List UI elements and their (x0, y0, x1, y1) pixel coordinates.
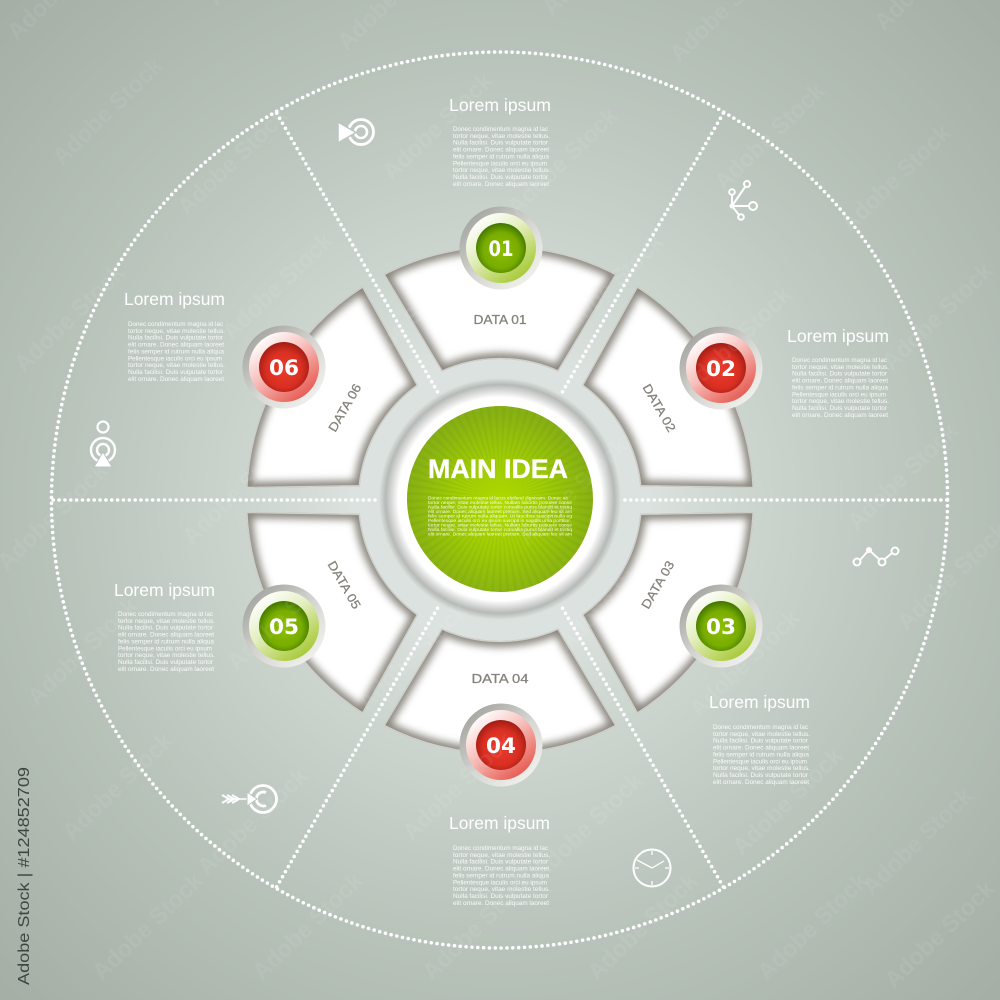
body 06: elit ornare. Donec aliquam laoreet (128, 376, 224, 383)
button 01: 01 (488, 237, 514, 261)
body 03: Nulla facilisi. Duis vulputate tortor (713, 772, 808, 779)
heading 01: Lorem ipsum (449, 95, 551, 115)
button 05: 05 (269, 615, 299, 639)
body 04 (453, 845, 550, 907)
text block 06 (124, 289, 225, 383)
watermark: Adobe Stock (709, 77, 831, 196)
watermark: Adobe Stock (217, 227, 339, 346)
body 05: Donec condimentum magna id lac (118, 611, 213, 618)
body 02: Nulla facilisi. Duis vulputate tortor (792, 371, 887, 378)
body 05: elit ornare. Donec aliquam laoreet (118, 666, 214, 673)
body 04: felis semper id rutrum nulla aliqua (453, 872, 550, 879)
body 03 (713, 724, 810, 786)
body 06: felis semper id rutrum nulla aliqua (128, 348, 225, 355)
body 06: elit ornare. Donec aliquam laoreet (128, 342, 224, 349)
watermark: Adobe Stock (57, 727, 179, 846)
watermark: Adobe Stock (835, 119, 957, 238)
body 01: felis semper id rutrum nulla aliqua (453, 153, 550, 160)
watermark: Adobe Stock (582, 867, 704, 986)
body 02: Nulla facilisi. Duis vulputate tortor (792, 405, 887, 412)
central hub (379, 378, 621, 620)
watermark: Adobe Stock (352, 597, 474, 716)
body 01: tortor neque, vitae molestie tellus. (453, 167, 550, 174)
white ring (379, 378, 621, 620)
watermark: Adobe Stock (247, 867, 369, 986)
body 01 (453, 126, 550, 188)
body 04: tortor neque, vitae molestie tellus. (453, 852, 550, 859)
watermark: Adobe Stock (857, 782, 979, 901)
body 03: elit ornare. Donec aliquam laoreet (713, 779, 809, 786)
button 03: 03 (706, 615, 736, 639)
segment 04 (384, 628, 616, 754)
icon: branching nodes (729, 181, 757, 220)
body 05 (118, 611, 215, 673)
body 05: tortor neque, vitae molestie tellus. (118, 618, 215, 625)
heading 03: Lorem ipsum (709, 692, 810, 712)
button 02 (680, 326, 762, 410)
watermark: Adobe Stock (752, 867, 874, 986)
main idea body text: Nulla facilisi. Duis vulputate tortor convallis purus blandit et tristiq (428, 504, 573, 510)
body 02: Donec condimentum magna id lac (792, 357, 887, 364)
watermark: Adobe Stock (512, 432, 634, 551)
segment labels (325, 313, 678, 686)
watermark: Adobe Stock (684, 604, 806, 723)
label: data 04: DATA 04 (472, 672, 529, 686)
button 04: 04 (486, 734, 516, 758)
body 05: tortor neque, vitae molestie tellus. (118, 652, 215, 659)
body 04: Donec condimentum magna id lac (453, 845, 548, 852)
watermark: Adobe Stock (9, 259, 131, 378)
body 04: Nulla facilisi. Duis vulputate tortor (453, 893, 548, 900)
body 03: elit ornare. Donec aliquam laoreet (713, 745, 809, 752)
main idea body text: tortor neque, vitae molestie tellus. Nullam lobortis posuere conse (428, 500, 573, 505)
watermark: Adobe Stock (727, 742, 849, 861)
body 06: tortor neque, vitae molestie tellus. (128, 328, 225, 335)
main idea body text: Nulla facilisi. Duis vulputate tortor convallis purus blandit et tristiq (428, 527, 573, 532)
text block 01 (449, 95, 551, 188)
watermark: Adobe Stock (377, 67, 499, 186)
heading 02: Lorem ipsum (787, 326, 889, 346)
body 06 (128, 321, 225, 383)
body 04: Nulla facilisi. Duis vulputate tortor (453, 859, 548, 866)
body 05: felis semper id rutrum nulla aliqua (118, 638, 215, 645)
watermark: Adobe Stock (527, 767, 649, 886)
watermark: Adobe Stock (548, 228, 670, 347)
body 02: tortor neque, vitae molestie tellus. (792, 364, 889, 371)
body 01: elit ornare. Donec aliquam laoreet (453, 147, 549, 154)
body 06: Pellentesque iaculis orci eu ipsum (128, 355, 222, 362)
watermark: Adobe Stock (192, 762, 314, 881)
body 02: Pellentesque iaculis orci eu ipsum (792, 391, 886, 398)
segment 05 (246, 512, 418, 714)
body 02: elit ornare. Donec aliquam laoreet (792, 412, 888, 419)
label: data 03: DATA 03 (639, 559, 677, 611)
body 06: Nulla facilisi. Duis vulputate tortor (128, 369, 223, 376)
body 01: Nulla facilisi. Duis vulputate tortor (453, 140, 548, 147)
heading 06: Lorem ipsum (124, 289, 225, 309)
body 03: felis semper id rutrum nulla aliqua (713, 751, 810, 758)
watermark: Adobe Stock (22, 592, 144, 711)
watermark: Adobe Stock (552, 537, 674, 656)
button 02: 02 (706, 357, 736, 381)
heading 04: Lorem ipsum (449, 813, 550, 833)
main idea body text: Donec condimentum magna id lacus eleifend dignissim. Donec ac (428, 496, 569, 500)
body 06: tortor neque, vitae molestie tellus. (128, 362, 225, 369)
watermark: Adobe Stock (177, 432, 299, 551)
watermark: Adobe Stock (502, 102, 624, 221)
body 02: elit ornare. Donec aliquam laoreet (792, 378, 888, 385)
button 04 (460, 704, 542, 786)
watermark: Adobe Stock (417, 867, 539, 986)
body 02: tortor neque, vitae molestie tellus. (792, 398, 889, 405)
watermark: Adobe Stock (397, 727, 519, 846)
body 02: felis semper id rutrum nulla aliqua (792, 384, 889, 391)
body 05: elit ornare. Donec aliquam laoreet (118, 632, 214, 639)
body 05: Nulla facilisi. Duis vulputate tortor (118, 625, 213, 632)
label: data 06: DATA 06 (326, 382, 364, 434)
body 01: tortor neque, vitae molestie tellus. (453, 133, 550, 140)
watermark: Adobe Stock (222, 557, 344, 676)
body 04: elit ornare. Donec aliquam laoreet (453, 866, 549, 873)
watermark: Adobe Stock (172, 102, 294, 221)
label: data 05: DATA 05 (325, 559, 363, 611)
body 05: Pellentesque iaculis orci eu ipsum (118, 645, 212, 652)
watermark: Adobe Stock (877, 257, 999, 376)
watermark: Adobe Stock (87, 867, 209, 986)
body 02 (792, 357, 889, 419)
icon: line chart (854, 547, 898, 566)
button 01 (460, 206, 542, 290)
body 01: elit ornare. Donec aliquam laoreet (453, 181, 549, 188)
button 03 (680, 584, 762, 668)
main idea body text: tortor neque, vitae molestie tellus. Nullam lobortis posuere conse (428, 522, 573, 528)
label: data 01: DATA 01 (474, 313, 527, 327)
watermark: Adobe Stock (676, 281, 798, 400)
body 04: tortor neque, vitae molestie tellus. (453, 886, 550, 893)
label: data 02: DATA 02 (640, 382, 678, 434)
body 01: Nulla facilisi. Duis vulputate tortor (453, 174, 548, 181)
green disc (407, 406, 593, 592)
body 01: Donec condimentum magna id lac (453, 126, 548, 133)
text block 05 (114, 580, 215, 673)
body 06: Nulla facilisi. Duis vulputate tortor (128, 335, 223, 342)
button 06: 06 (269, 356, 299, 380)
watermark: Adobe Stock (842, 417, 964, 536)
text block 04 (449, 813, 550, 907)
body 05: Nulla facilisi. Duis vulputate tortor (118, 659, 213, 666)
segment 03 (582, 512, 754, 714)
main idea body text: Pellentesque iaculis orci eu ipsum suscipit in sagittis urna porttitor. (428, 518, 571, 523)
icon: person signal (91, 422, 115, 467)
watermark: Adobe Stock (47, 52, 169, 171)
watermark: Adobe Stock (342, 267, 464, 386)
body 03: tortor neque, vitae molestie tellus. (713, 765, 810, 772)
text block 03 (709, 692, 810, 786)
body 03: Nulla facilisi. Duis vulputate tortor (713, 738, 808, 745)
main idea body text: elit ornare. Donec aliquam laoreet pretium. Sed aliquam leo sit am (428, 532, 572, 536)
icon: clock (634, 850, 670, 886)
main idea body text: felis semper id rutrum nulla aliquam. Ut faucibus suscipit nulla eg (428, 514, 573, 518)
button 06 (242, 326, 326, 408)
body 04: elit ornare. Donec aliquam laoreet (453, 900, 549, 907)
segment 02 (582, 286, 754, 488)
main idea body text (428, 496, 573, 536)
segment 01 (384, 246, 616, 372)
body 03: Donec condimentum magna id lac (713, 724, 808, 731)
body 03: tortor neque, vitae molestie tellus. (713, 731, 810, 738)
sunburst rays (454, 452, 546, 546)
body 01: Pellentesque iaculis orci eu ipsum (453, 160, 547, 167)
icon: target with triangle (338, 120, 374, 144)
button 05 (242, 584, 326, 668)
segment 06 (246, 286, 418, 488)
body 03: Pellentesque iaculis orci eu ipsum (713, 758, 807, 765)
body 04: Pellentesque iaculis orci eu ipsum (453, 879, 547, 886)
body 06: Donec condimentum magna id lac (128, 321, 223, 328)
watermark: Adobe Stock (879, 875, 1000, 994)
heading 05: Lorem ipsum (114, 580, 215, 600)
main idea body text: elit ornare. Donec aliquam laoreet pretium. Sed aliquam leo sit am (428, 509, 572, 514)
text block 02 (787, 326, 889, 419)
title: main idea: MAIN IDEA (428, 454, 568, 484)
stock id caption: Adobe Stock | #124852709 (16, 767, 33, 985)
icon: arrow and target (222, 786, 276, 812)
